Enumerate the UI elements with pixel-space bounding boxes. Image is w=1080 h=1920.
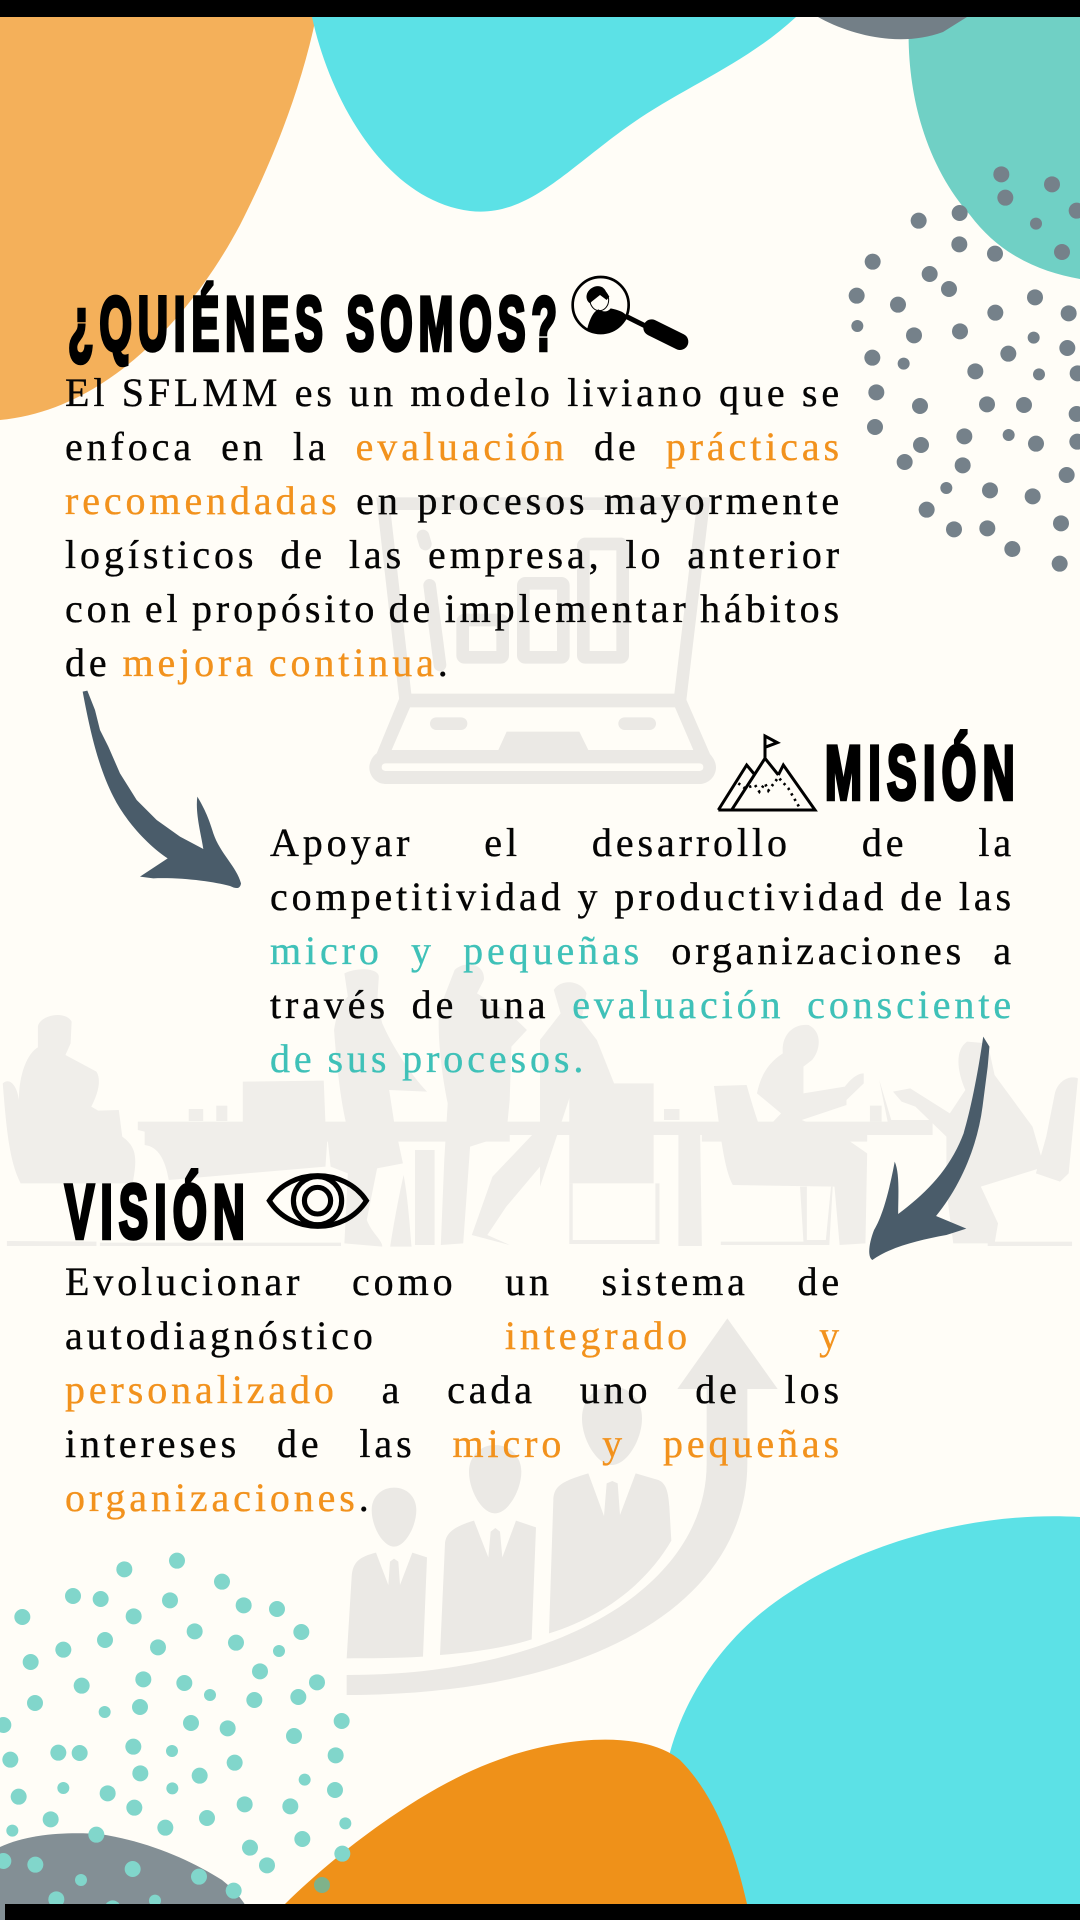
text block: mision: micro y pequeñas organizaciones a	[270, 928, 1015, 973]
blob: orange top left	[0, 17, 316, 420]
watermark: office silhouettes left	[3, 964, 540, 1247]
blob: cyan bottom right	[668, 1516, 1080, 1904]
watermark: growth arrow with people	[347, 1318, 778, 1695]
text block: mision: Apoyar el desarrollo de la	[270, 820, 1015, 865]
blob: gray bottom left	[0, 1833, 253, 1920]
dots: gray cluster	[849, 166, 1080, 572]
text block: quienes somos: El SFLMM es un modelo liviano que se	[65, 370, 843, 415]
text block: vision: organizaciones.	[65, 1475, 373, 1520]
person large	[549, 1387, 671, 1633]
text block: vision: personalizado a cada uno de los	[65, 1367, 843, 1412]
arrow: to vision	[869, 1037, 989, 1260]
text block: mision: través de una evaluación consciente	[270, 982, 1015, 1027]
person small	[347, 1488, 427, 1658]
text block: vision: Evolucionar como un sistema de	[65, 1259, 843, 1304]
text block: mision	[270, 820, 1015, 1081]
blob: orange bottom	[285, 1740, 747, 1904]
text block: quienes somos: con el propósito de implementar hábitos	[65, 586, 843, 631]
text block: mision: de sus procesos.	[270, 1036, 587, 1081]
person medium	[440, 1445, 536, 1655]
text block: quienes somos: de mejora continua.	[65, 640, 452, 685]
blob: gray top	[818, 17, 967, 39]
bottom black bar	[5, 1904, 1080, 1920]
growth arrow	[347, 1318, 778, 1695]
dots: teal cluster	[0, 1553, 351, 1916]
text block: vision: autodiagnóstico integrado y	[65, 1313, 843, 1358]
heading: vision: VISIÓN	[65, 1170, 251, 1255]
icon: eye	[269, 1176, 366, 1226]
blob: cyan top	[312, 17, 796, 212]
icon: magnifier with person	[573, 277, 680, 342]
text block: quienes somos: logísticos de las empresa, lo anterior	[65, 532, 843, 577]
watermark: laptop	[369, 504, 716, 784]
watermark: office silhouettes right	[540, 982, 1078, 1246]
icon: mountain with flag	[718, 736, 815, 810]
text block: vision	[65, 1259, 843, 1520]
heading: quienes somos: ¿QUIÉNES SOMOS?	[68, 282, 563, 367]
text block: vision: intereses de las micro y pequeñas	[65, 1421, 843, 1466]
text block: quienes somos: enfoca en la evaluación de prácticas	[65, 424, 843, 469]
arrow: to mision	[83, 691, 241, 888]
text block: quienes somos: recomendadas en procesos mayormente	[65, 478, 843, 523]
text block: mision: competitividad y productividad de las	[270, 874, 1015, 919]
text block: quienes somos	[65, 370, 843, 685]
top black bar	[0, 0, 1080, 17]
blob: teal top right	[909, 17, 1080, 279]
